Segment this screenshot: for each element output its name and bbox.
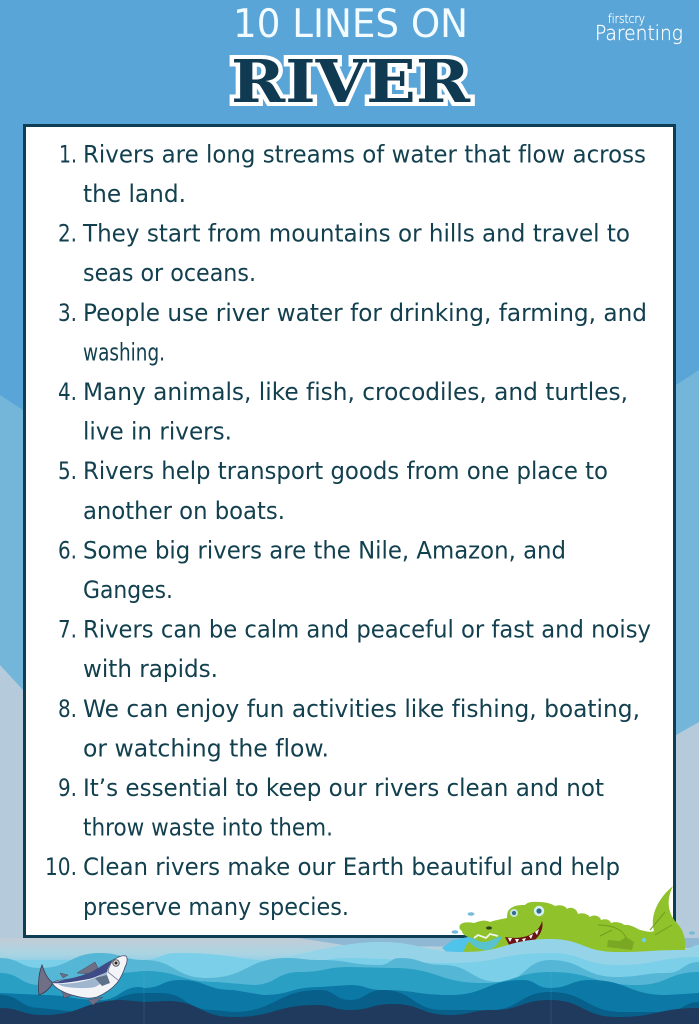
icon: crocodile [442,886,695,958]
item 4: 4. [58,378,77,406]
item 5: Rivers help transport goods from one place to [83,457,608,485]
item 10: preserve many species. [83,893,349,921]
item 8: or watching the flow. [83,734,329,762]
item 5: another on boats. [83,497,285,525]
item 1: Rivers are long streams of water that flow across [83,140,646,168]
item 8: We can enjoy fun activities like fishing, boating, [83,695,640,723]
item 1 [59,140,646,208]
item 6: Some big rivers are the Nile, Amazon, and [83,536,566,564]
title: 10 lines on: 10 LINES ON [233,2,468,47]
item 1: the land. [83,180,186,208]
item 6: 6. [58,536,77,564]
item 9: 9. [58,774,77,802]
item 4: Many animals, like fish, crocodiles, and turtles, [83,378,628,406]
item 5 [58,457,608,525]
heading: river: RIVER [231,47,471,116]
panel: list of ten lines [24,126,674,936]
item 3 [58,299,647,366]
item 4: live in rivers. [83,418,232,446]
item 2: They start from mountains or hills and travel to [82,220,630,248]
item 7: with rapids. [83,655,218,683]
item 9 [58,774,604,842]
item 2 [58,220,630,287]
item 7 [58,616,651,683]
item 6 [58,536,566,604]
logo: firstcry parenting: firstcry [608,12,645,26]
waves: river water layers [0,939,699,1024]
item 10 [45,853,620,921]
icon: fish [38,956,127,1005]
item 3: 3. [58,299,77,327]
item 2: seas or oceans. [83,259,256,287]
item 6: Ganges. [83,576,173,604]
item 2: 2. [58,220,77,248]
list: ten lines about rivers [45,140,651,921]
logo: firstcry parenting: Parenting [595,21,683,45]
item 10: 10. [45,853,77,881]
item 8: 8. [58,695,77,723]
item 3: People use river water for drinking, farming, and [83,299,647,327]
item 8 [58,695,640,762]
item 9: throw waste into them. [83,814,333,842]
item 7: Rivers can be calm and peaceful or fast and noisy [83,616,651,644]
item 7: 7. [58,616,77,644]
item 3: washing. [83,338,165,366]
item 9: It’s essential to keep our rivers clean and not [83,774,604,802]
item 4 [58,378,628,446]
item 1: 1. [59,140,77,168]
item 10: Clean rivers make our Earth beautiful and help [83,853,620,881]
logo: firstcry parenting [595,12,683,45]
item 5: 5. [58,457,77,485]
